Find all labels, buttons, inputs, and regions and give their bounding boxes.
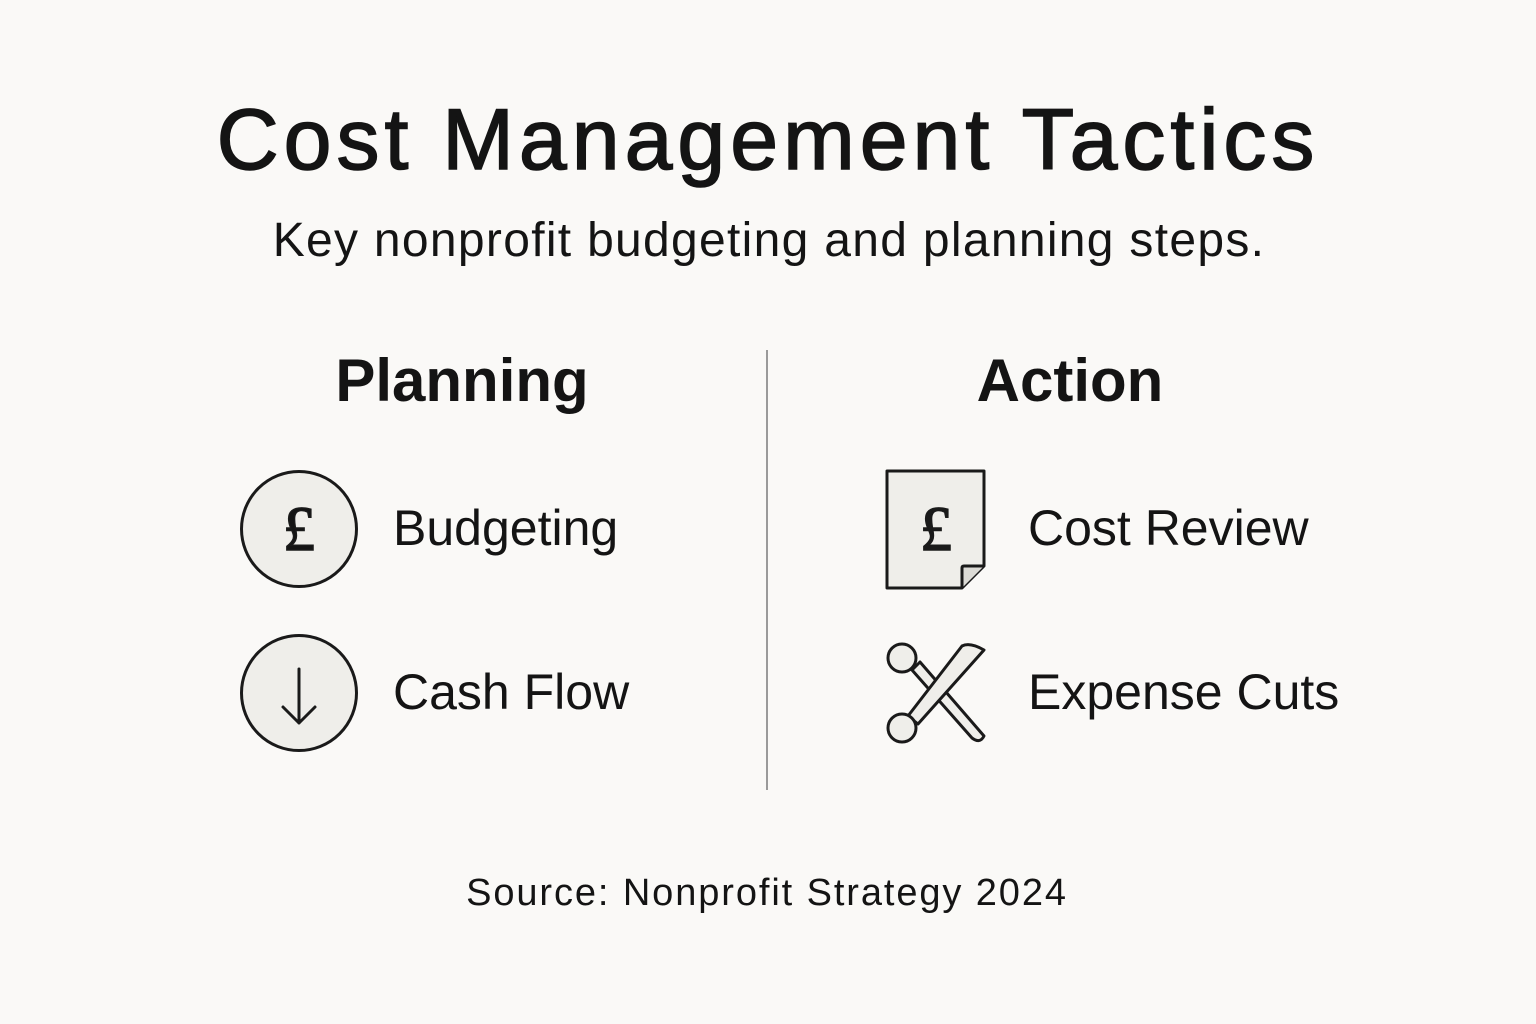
label: Cash Flow: Cash Flow bbox=[393, 664, 629, 720]
heading: Action: Action bbox=[977, 347, 1163, 414]
subtitle: Key nonprofit budgeting and planning steps. bbox=[273, 214, 1265, 267]
icon: document pound: £ bbox=[920, 493, 952, 564]
label: Cost Review: Cost Review bbox=[1028, 500, 1309, 556]
icon: document pound bbox=[886, 470, 986, 590]
label: Budgeting: Budgeting bbox=[393, 500, 618, 556]
heading: Planning: Planning bbox=[335, 347, 589, 414]
label: Expense Cuts: Expense Cuts bbox=[1028, 664, 1339, 720]
icon: pound circle bbox=[240, 470, 358, 588]
icon: pound circle: £ bbox=[283, 493, 315, 564]
title: Cost Management Tactics bbox=[217, 92, 1319, 188]
icon: down arrow circle bbox=[240, 634, 358, 752]
icon: scissors bbox=[886, 642, 986, 744]
source: Source: Nonprofit Strategy 2024 bbox=[466, 872, 1068, 914]
